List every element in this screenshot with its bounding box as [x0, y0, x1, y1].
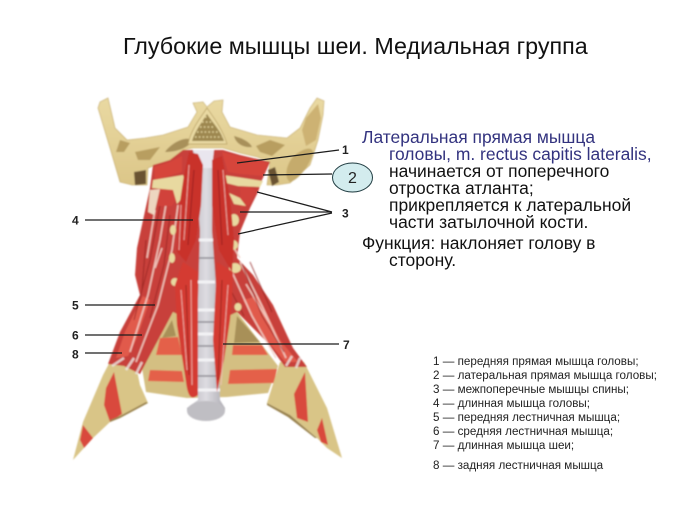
legend: 2 — латеральная прямая мышца головы;	[433, 369, 657, 382]
longus muscles	[175, 152, 234, 397]
description text block: отростка атланта;	[389, 178, 534, 198]
description text block: сторону.	[389, 250, 456, 270]
diagram numbers: 1	[342, 143, 349, 157]
diagram numbers: 6	[72, 328, 79, 342]
lower cervical and thoracic bone	[142, 312, 278, 398]
skull base bone	[98, 98, 324, 186]
legend	[433, 355, 657, 472]
leader lines	[85, 150, 339, 353]
basilar bone cross-section	[188, 108, 227, 144]
scalene and upper muscle mass	[108, 150, 307, 374]
diagram numbers: 5	[72, 298, 79, 312]
legend: 3 — межпоперечные мышцы спины;	[433, 383, 629, 396]
diagram numbers	[72, 143, 350, 362]
callout: number 2: 2	[348, 170, 357, 187]
title: Глубокие мышцы шеи. Медиальная группа	[123, 33, 588, 59]
diagram numbers: 4	[72, 214, 79, 228]
spine column	[187, 150, 225, 421]
callout: number 2	[332, 163, 372, 192]
legend: 1 — передняя прямая мышца головы;	[433, 355, 639, 368]
description text block: начинается от поперечного	[389, 161, 609, 181]
diagram numbers: 8	[72, 348, 79, 362]
description text block: части затылочной кости.	[389, 212, 588, 232]
diagram numbers: 3	[342, 206, 349, 220]
legend: 8 — задняя лестничная мышца	[433, 459, 603, 472]
description text block: прикрепляется к латеральной	[389, 195, 631, 215]
right rib	[267, 362, 342, 458]
legend: 6 — средняя лестничная мышца;	[433, 425, 613, 438]
legend: 7 — длинная мышца шеи;	[433, 439, 574, 452]
description text block: головы, m. rectus capitis lateralis,	[389, 144, 652, 164]
left rib	[73, 356, 148, 460]
description text block: Функция: наклоняет голову в	[362, 233, 595, 253]
diagram numbers: 7	[343, 338, 350, 352]
legend: 5 — передняя лестничная мышца;	[433, 411, 620, 424]
description text block: Латеральная прямая мышца	[362, 127, 595, 147]
transverse processes	[152, 175, 263, 311]
description text block	[362, 127, 652, 270]
legend: 4 — длинная мышца головы;	[433, 397, 590, 410]
